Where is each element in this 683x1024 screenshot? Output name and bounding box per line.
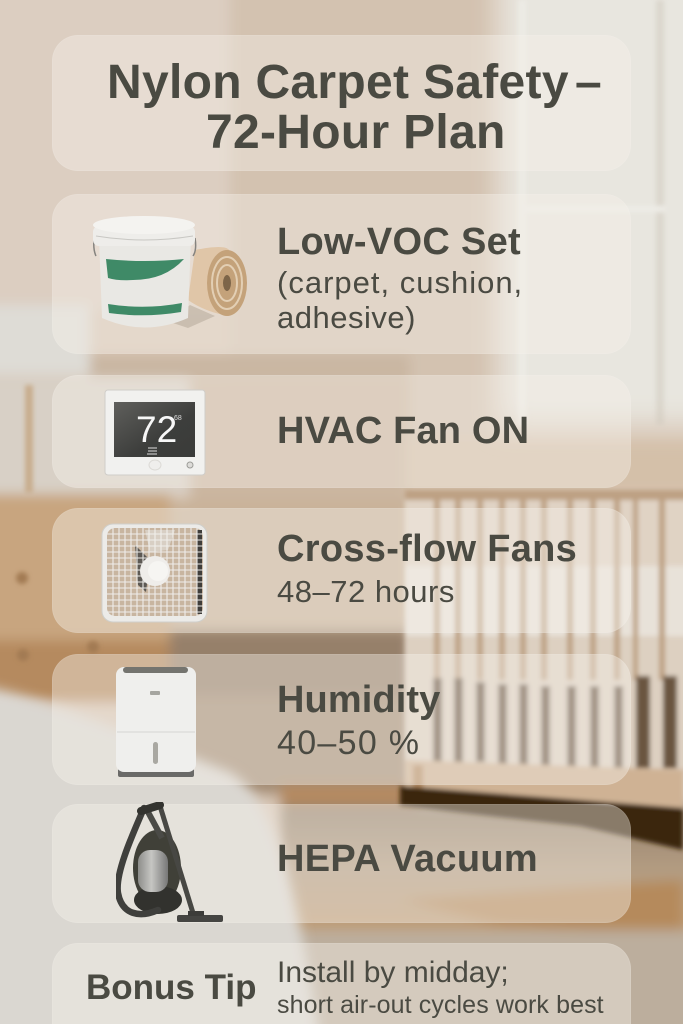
heading: plan title: 72-Hour Plan: [206, 106, 506, 159]
text: low-VOC set: [277, 221, 523, 335]
background: window: [500, 0, 683, 425]
icon: thermostat: 68: [174, 415, 182, 422]
text: low-VOC set: (carpet, cushion,: [277, 265, 523, 300]
text: HVAC fan on: HVAC Fan ON: [277, 410, 529, 452]
icon: thermostat: [104, 390, 206, 476]
panel: humidity: [52, 654, 631, 785]
background: bed: [0, 686, 320, 1024]
panel: HVAC fan: [52, 375, 631, 488]
icon: dehumidifier: [116, 667, 196, 777]
icon: vacuum cleaner: [116, 802, 223, 922]
panel: cross-flow fans: [52, 508, 631, 633]
text: cross-flow fans: 48–72 hours: [277, 574, 455, 609]
heading: plan title: Nylon Carpet Safety: [107, 56, 569, 109]
text: humidity: 40–50 %: [277, 724, 420, 762]
heading: plan title: [107, 56, 602, 159]
heading: plan title: –: [575, 56, 602, 109]
icon: thermostat: 72: [136, 409, 177, 450]
text: low-VOC set: adhesive): [277, 300, 416, 335]
text: bonus tip detail: Install by midday;: [277, 956, 509, 989]
background: crib: [400, 490, 683, 850]
heading: bonus tip: Bonus Tip: [86, 968, 256, 1007]
panel: title: [52, 35, 631, 171]
panel: low-VOC set: [52, 194, 631, 354]
text: humidity: Humidity: [277, 679, 440, 721]
text: HEPA vacuum: HEPA Vacuum: [277, 838, 538, 880]
icon: adhesive bucket and cushion roll: [93, 216, 247, 328]
text: humidity: [277, 679, 440, 762]
panel: HEPA vacuum: [52, 804, 631, 923]
text: cross-flow fans: [277, 528, 577, 609]
text: cross-flow fans: Cross-flow Fans: [277, 528, 577, 570]
text: low-VOC set: Low-VOC Set: [277, 221, 521, 263]
icon: box fan: [102, 524, 208, 622]
text: bonus tip detail: short air-out cycles work best: [277, 991, 604, 1019]
text: bonus tip detail: [277, 956, 604, 1019]
panel: bonus tip: [52, 943, 631, 1024]
